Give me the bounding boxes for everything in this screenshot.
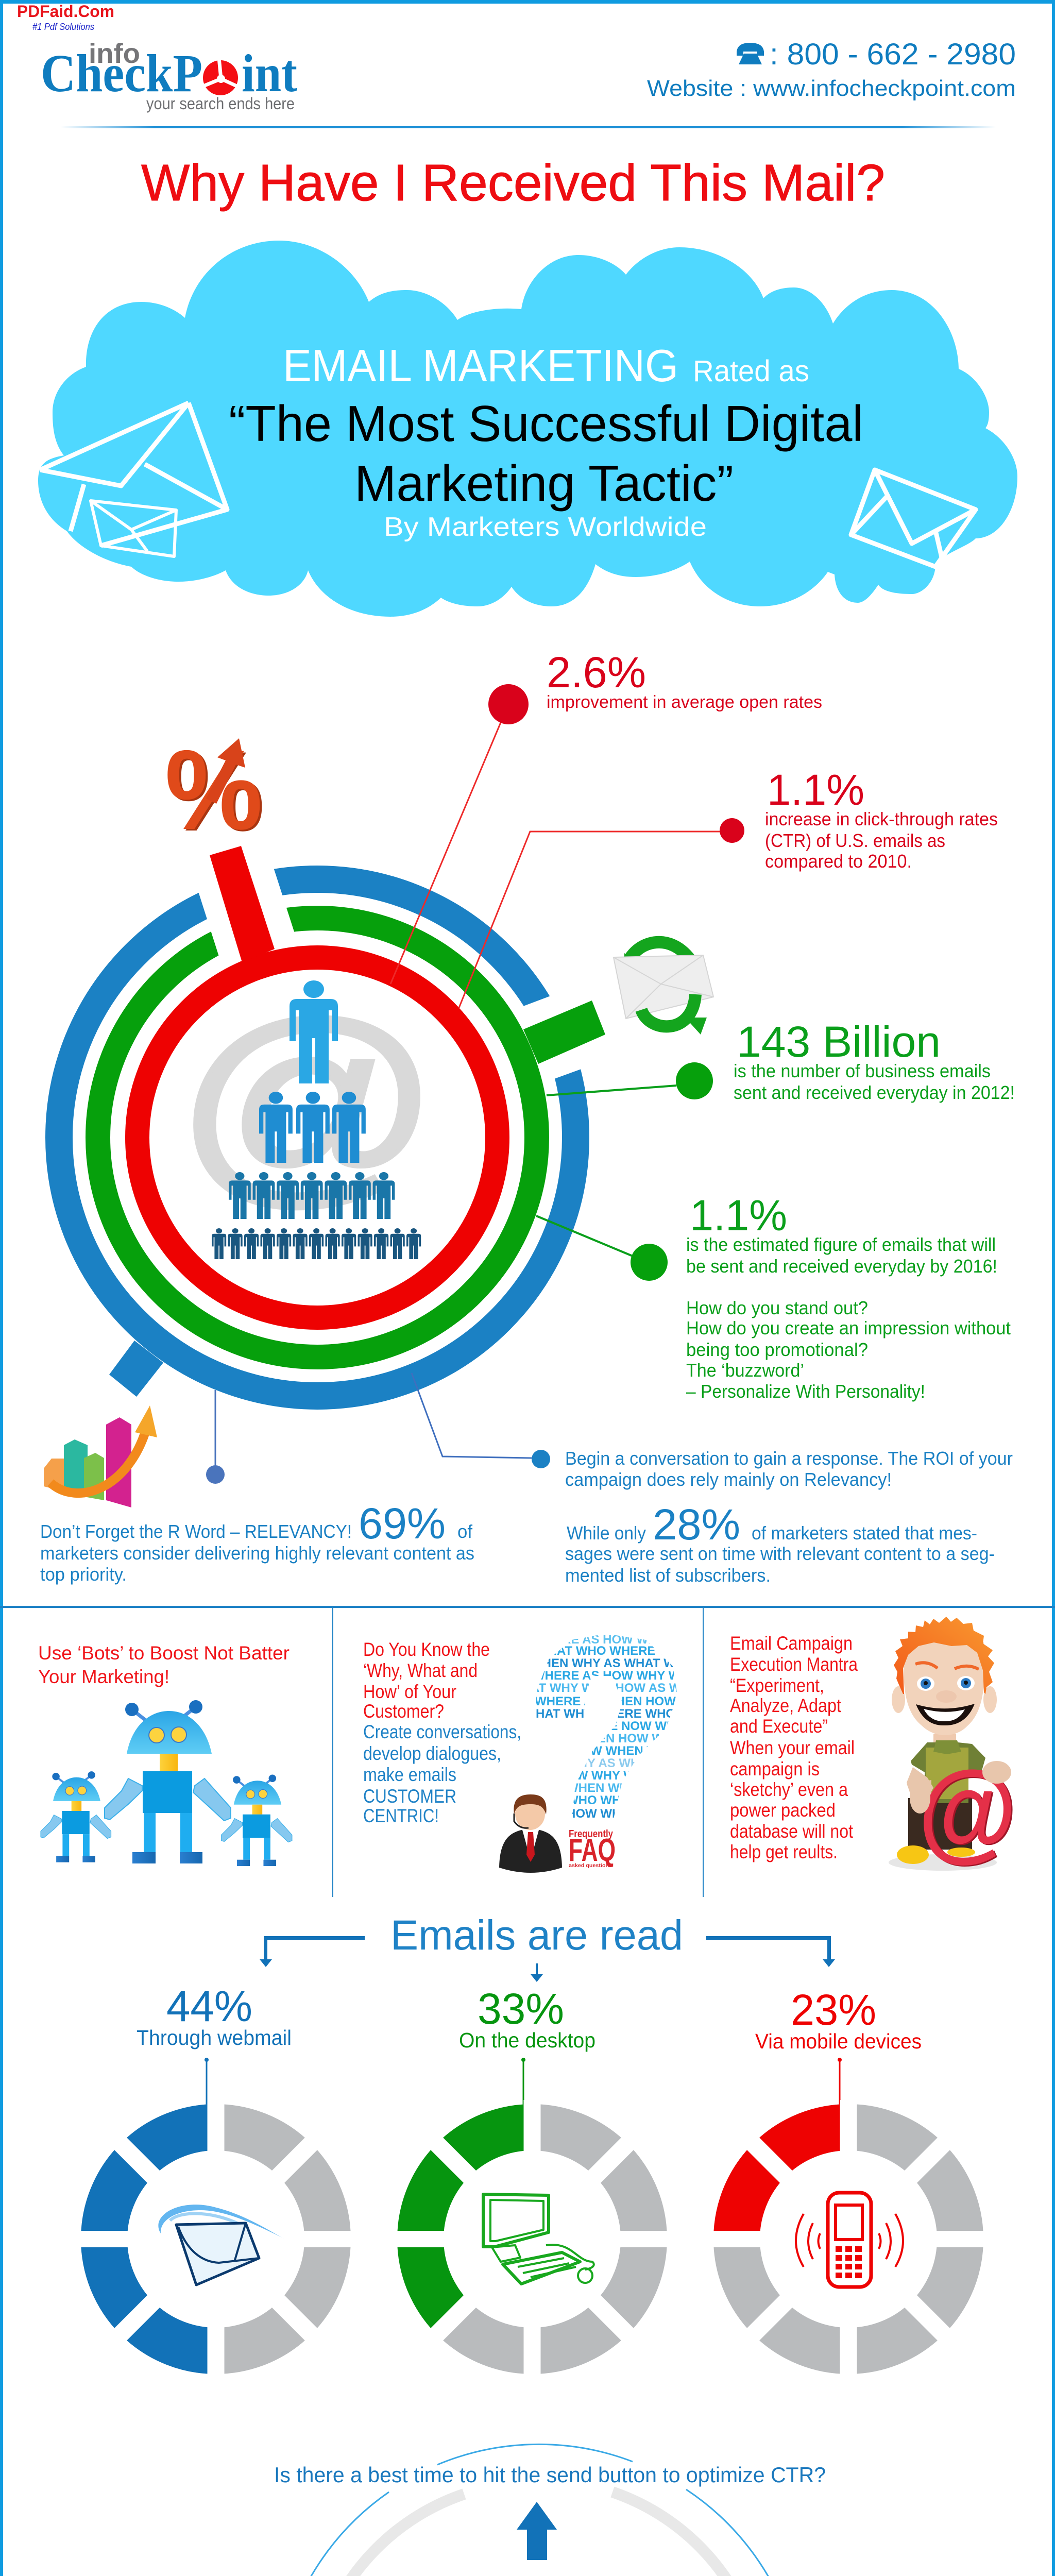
- icon: question mark word cloud: [536, 1635, 677, 1818]
- callout: 1.1% by 2016: is the estimated figure of emails that will: [686, 1234, 996, 1255]
- people pyramid: [212, 980, 421, 1259]
- logo: Info CheckPoint: CheckP: [41, 44, 202, 103]
- heading: bots: [38, 1642, 290, 1687]
- text: know your customer: Do You Know the: [363, 1639, 490, 1660]
- icon: large robot: [105, 1700, 231, 1863]
- icon: small robot left: [41, 1771, 111, 1862]
- callout: begin a conversation: campaign does rely mainly on Relevancy!: [565, 1469, 892, 1490]
- callout: 1.1% CTR: 1.1%: [767, 766, 864, 814]
- cloud headline: Marketing Tactic”: [354, 455, 734, 512]
- text: campaign mantra: help get reults.: [730, 1841, 838, 1862]
- text: R word relevancy: top priority.: [40, 1564, 127, 1585]
- text: campaign mantra: power packed: [730, 1800, 836, 1821]
- text: know your customer: develop dialogues,: [363, 1743, 501, 1764]
- callout: 143 Billion: [547, 1018, 1015, 1103]
- text: know your customer: ‘Why, What and: [363, 1660, 478, 1681]
- cloud banner: [38, 241, 1017, 617]
- icon: question mark word cloud: WHEN WHY AS WHAT WHO WHERE HOW WHY: [531, 1656, 809, 1670]
- icon: question mark word cloud: WHERE AS HOW WHY WHAT WHO WHEN: [533, 1669, 779, 1683]
- callout: 1.1% by 2016: [536, 1191, 997, 1281]
- icon: cartoon boy with at sign: [889, 1617, 1018, 1873]
- icon: question mark word cloud: WHEN WHERE NOW WHY HOW WHEN: [531, 1719, 758, 1733]
- panel dividers: [0, 1606, 1055, 1897]
- arrow: up: [517, 2502, 557, 2560]
- stat: via mobile devices: [755, 1986, 922, 2110]
- circular timing diagram: [275, 2444, 803, 2576]
- text: know your customer: Create conversations,: [363, 1721, 521, 1742]
- icon: question mark word cloud: WHO WHEN WHY AS: [567, 1793, 690, 1807]
- icon: FAQ: FAQ: [569, 1833, 616, 1868]
- red ring: [137, 957, 498, 1318]
- green ring: [98, 918, 537, 1357]
- logo: Info CheckPoint: int: [242, 44, 297, 103]
- stat: through webmail: [137, 1982, 292, 2110]
- cloud headline: [229, 340, 863, 542]
- text: know your customer: CUSTOMER: [363, 1786, 456, 1807]
- icon: question mark word cloud: WHERE AS WHEN HOW WHERE WHAT HOW: [535, 1694, 798, 1708]
- callout: 1.1% CTR: [459, 766, 998, 1008]
- icon: question mark word cloud: WHEN WHERE WHAT: [567, 1781, 694, 1795]
- icon: small robot right: [222, 1774, 292, 1866]
- text: 28% of marketers: 28%: [653, 1500, 740, 1549]
- icon: FAQ: asked questions: [569, 1863, 612, 1869]
- text: 28% of marketers: mented list of subscribers.: [565, 1565, 771, 1586]
- background at sign: @: [175, 978, 440, 1225]
- callout: 2.6% open rates: 2.6%: [547, 648, 646, 697]
- cloud headline: Rated as: [693, 354, 809, 388]
- panel: mantra: [730, 1617, 1018, 1873]
- thin blue orbit: [275, 2444, 803, 2576]
- cloud headline: EMAIL MARKETING: [283, 340, 678, 391]
- contact details: [647, 38, 1016, 101]
- watermark: PDFaid: #1 Pdf Solutions: [32, 22, 94, 32]
- callout: 143 Billion: 143 Billion: [737, 1018, 941, 1066]
- callout: 1.1% by 2016: be sent and received everyday by 2016!: [686, 1256, 997, 1277]
- text: know your customer: make emails: [363, 1764, 456, 1785]
- icon: support agent: [499, 1794, 562, 1873]
- icon: question mark word cloud: WHY AS WHAT WHO WHEN: [567, 1756, 730, 1770]
- title: Why Have I Received This Mail?: [141, 154, 885, 212]
- text: 28% of marketers: sages were sent on time with relevant content to a seg-: [565, 1543, 995, 1564]
- donut chart: webmail: [77, 2100, 355, 2378]
- contact details: Website : www.infocheckpoint.com: [647, 76, 1016, 101]
- icon: envelopes on the left: [40, 403, 227, 556]
- heading: bots: Your Marketing!: [38, 1666, 169, 1687]
- callout: 1.1% CTR: increase in click-through rates: [765, 808, 998, 829]
- text: R word relevancy: Don’t Forget the R Word – RELEVANCY!: [40, 1521, 352, 1542]
- text: campaign mantra: and Execute”: [730, 1716, 828, 1737]
- icon: question mark word cloud: WHEN HOW WHAT WHO AS: [577, 1732, 742, 1745]
- text: 28% of marketers: [565, 1500, 995, 1586]
- callout: 1.1% by 2016: 1.1%: [690, 1191, 787, 1240]
- icon: question mark word cloud: OW WHY WHEN WHERE: [567, 1769, 711, 1783]
- icon: percent with arrow: %: [165, 726, 263, 853]
- blue stem: [109, 1341, 163, 1397]
- icon: FAQ: Frequently: [569, 1828, 614, 1840]
- icon: envelope with refresh arrows: [614, 942, 713, 1035]
- icon: cartoon boy with at sign: @: [918, 1748, 1017, 1872]
- icon: question mark word cloud: HOW WHO WHEN: [567, 1807, 672, 1821]
- text: 28% of marketers: While only: [567, 1522, 646, 1544]
- text: campaign mantra: “Experiment,: [730, 1675, 824, 1696]
- stat: through webmail: Through webmail: [137, 2026, 292, 2049]
- text: campaign mantra: [730, 1633, 858, 1862]
- icon: envelope on the right: [851, 470, 976, 567]
- icon: mobile phone: [796, 2193, 903, 2287]
- callout: 143 Billion: is the number of business emails: [734, 1060, 991, 1081]
- text: know your customer: How’ of Your: [363, 1681, 456, 1702]
- callout: 1.1% CTR: (CTR) of U.S. emails as: [765, 830, 945, 851]
- text: how do you stand out: How do you stand out?: [686, 1297, 868, 1318]
- blue ring: [59, 879, 576, 1396]
- logo: Info CheckPoint: your search ends here: [146, 94, 295, 113]
- icon: desktop computer: [483, 2194, 594, 2284]
- callout: begin a conversation: [412, 1373, 1013, 1490]
- icon: question mark word cloud: WHERE AS HOW WHY WHAT WHO WHEN WHERE: [533, 1633, 829, 1647]
- donut chart: mobile: [709, 2100, 988, 2378]
- icon: question mark word cloud: AT WHY WHO HOW AS WHO WHEN WHAT: [531, 1681, 780, 1695]
- text: campaign mantra: campaign is: [730, 1758, 820, 1780]
- heading: bots: Use ‘Bots’ to Boost Not Batter: [38, 1642, 290, 1664]
- logo: Info CheckPoint: [41, 38, 297, 113]
- callout: 1.1% CTR: compared to 2010.: [765, 851, 912, 872]
- donut chart: desktop: [393, 2100, 671, 2378]
- arrows: emails are read: [260, 1936, 835, 1982]
- text: how do you stand out: The ‘buzzword’: [686, 1360, 804, 1381]
- icon: FAQ: [569, 1828, 616, 1869]
- contact details: : 800 - 662 - 2980: [770, 38, 1016, 71]
- callout dot: relevancy: [206, 1390, 225, 1484]
- stat: through webmail: 44%: [166, 1982, 252, 2030]
- red stem: [210, 846, 275, 962]
- logo: Info CheckPoint: info: [89, 38, 140, 69]
- text: how do you stand out: How do you create an impression without: [686, 1317, 1011, 1338]
- heading: emails are read: Emails are read: [390, 1912, 683, 1959]
- text: know your customer: Customer?: [363, 1701, 444, 1722]
- stat: on the desktop: On the desktop: [459, 2028, 595, 2052]
- text: campaign mantra: When your email: [730, 1737, 855, 1758]
- callout: begin a conversation: Begin a conversation to gain a response. The ROI of your: [565, 1448, 1013, 1469]
- icon: percent with arrow: %: [167, 728, 265, 855]
- text: how do you stand out: being too promotional?: [686, 1339, 868, 1360]
- text: how do you stand out: – Personalize With Personality!: [686, 1381, 925, 1402]
- text: know your customer: CENTRIC!: [363, 1805, 439, 1826]
- stat: via mobile devices: 23%: [791, 1986, 876, 2034]
- icon: question mark word cloud: WHAT WHO WHERE WHY AS HOW WHEN WHAT: [536, 1644, 822, 1658]
- grey orbit: [313, 2492, 763, 2576]
- text: R word relevancy: [40, 1499, 474, 1585]
- cloud headline: “The Most Successful Digital: [229, 395, 863, 452]
- callout: 2.6% open rates: improvement in average open rates: [547, 692, 822, 712]
- icon: growth bar chart: [44, 1405, 157, 1507]
- icon: telephone: [737, 43, 764, 64]
- text: 28% of marketers: of marketers stated that mes-: [752, 1522, 977, 1544]
- text: R word relevancy: 69%: [359, 1499, 446, 1548]
- stat: via mobile devices: Via mobile devices: [755, 2029, 922, 2053]
- callout: 2.6% open rates: [390, 648, 822, 984]
- panel: why what how: [364, 1635, 677, 1873]
- question: best send time: Is there a best time to hit the send button to optimize CTR?: [274, 2463, 826, 2487]
- callout: 143 Billion: sent and received everyday in 2012!: [734, 1082, 1015, 1103]
- icon: question mark word cloud: HOW WHEN WHY WHERE: [572, 1744, 725, 1758]
- cloud shape: [38, 241, 1017, 617]
- cloud headline: By Marketers Worldwide: [384, 512, 707, 542]
- green stem: [523, 1001, 605, 1064]
- icon: question mark word cloud: HAT WHY WHERE WHO WHO WHAT WHY: [536, 1707, 781, 1721]
- concentric rings chart: [59, 846, 605, 1397]
- watermark: PDFaid: PDFaid.Com: [17, 2, 114, 21]
- text: R word relevancy: marketers consider delivering highly relevant content as: [40, 1543, 474, 1564]
- text: how do you stand out: [686, 1297, 1011, 1402]
- text: campaign mantra: Email Campaign: [730, 1633, 853, 1654]
- watermark: PDFaid: [17, 2, 114, 32]
- text: campaign mantra: ‘sketchy’ even a: [730, 1779, 848, 1800]
- text: R word relevancy: of: [457, 1521, 473, 1542]
- text: campaign mantra: Analyze, Adapt: [730, 1695, 842, 1716]
- text: campaign mantra: Execution Mantra: [730, 1654, 858, 1675]
- panel: bots: [38, 1642, 292, 1866]
- stat: on the desktop: [459, 1985, 595, 2110]
- text: know your customer: [363, 1639, 521, 1826]
- stat: on the desktop: 33%: [478, 1985, 564, 2033]
- text: campaign mantra: database will not: [730, 1821, 854, 1842]
- icon: webmail envelope: [158, 2205, 284, 2285]
- icon: cartoon boy with at sign: @: [920, 1749, 1018, 1873]
